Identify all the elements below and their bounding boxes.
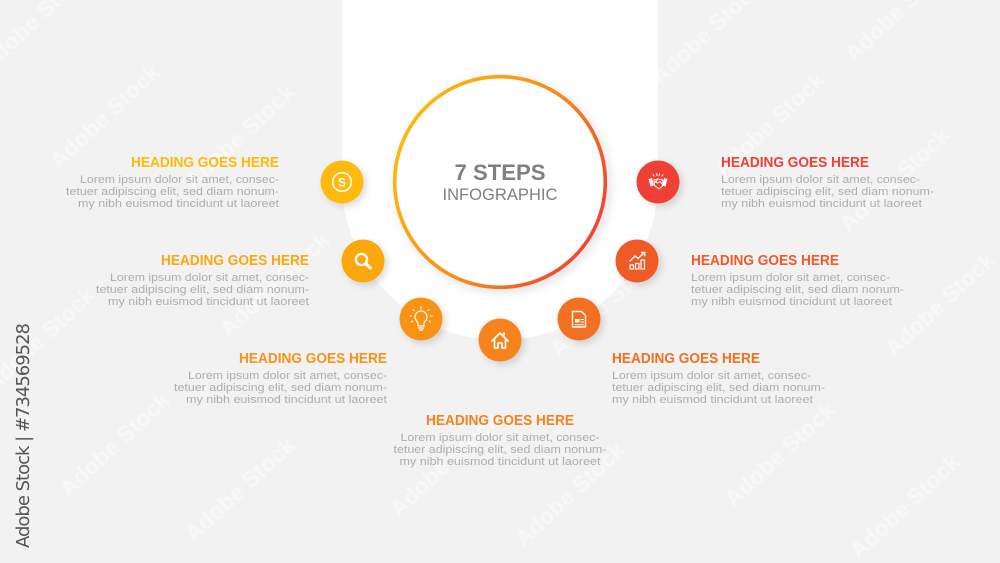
step 7 text: Lorem ipsum dolor sit amet, consec- (721, 174, 921, 186)
step 6 text (691, 253, 905, 308)
step 1 text: HEADING GOES HERE (131, 155, 279, 171)
step 4 text: Lorem ipsum dolor sit amet, consec- (400, 432, 600, 444)
icon: dollar coin: S (338, 176, 346, 190)
icon: light bulb (400, 298, 442, 340)
step 4 text (394, 413, 607, 468)
step 3 text: my nibh euismod tincidunt ut laoreet (186, 394, 387, 406)
icon: handshake (636, 160, 680, 204)
step 3 text: tetuer adipiscing elit, sed diam nonum- (174, 382, 388, 394)
step 1 text: tetuer adipiscing elit, sed diam nonum- (66, 186, 280, 198)
watermark text: Adobe Stock (709, 67, 830, 182)
step 1 text (66, 155, 280, 210)
stock id label: Adobe Stock | #734569528 (13, 323, 34, 548)
watermark text: Adobe Stock (844, 449, 965, 563)
center subtitle: INFOGRAPHIC (442, 186, 558, 204)
step 4 text: my nibh euismod tincidunt ut laoreet (400, 456, 601, 468)
step 3 text: HEADING GOES HERE (239, 351, 387, 367)
watermark text: Adobe Stock (44, 59, 165, 174)
step 1 text: my nibh euismod tincidunt ut laoreet (78, 198, 279, 210)
center circle (395, 77, 605, 287)
step 5 text: my nibh euismod tincidunt ut laoreet (612, 394, 813, 406)
watermark text: Adobe Stock (719, 397, 840, 512)
watermark text: Adobe Stock (384, 407, 505, 522)
step 3 text: Lorem ipsum dolor sit amet, consec- (188, 370, 388, 382)
step 1 text: Lorem ipsum dolor sit amet, consec- (80, 174, 280, 186)
step 6 text: Lorem ipsum dolor sit amet, consec- (691, 272, 891, 284)
white arch panel (342, 0, 658, 340)
step 5 text (612, 351, 826, 406)
step 4 text: tetuer adipiscing elit, sed diam nonum- (394, 444, 607, 456)
step 6 text: tetuer adipiscing elit, sed diam nonum- (691, 284, 905, 296)
step 7 text: tetuer adipiscing elit, sed diam nonum- (721, 186, 935, 198)
watermark text: Adobe Stock (214, 227, 335, 342)
step 7 text: HEADING GOES HERE (721, 155, 869, 171)
watermark text: Adobe Stock (544, 247, 665, 362)
step 6 text: HEADING GOES HERE (691, 253, 839, 269)
step 2 text: tetuer adipiscing elit, sed diam nonum- (96, 284, 310, 296)
step 4 text: HEADING GOES HERE (426, 413, 574, 429)
icon: dollar coin (320, 160, 364, 204)
icon: document (558, 298, 600, 340)
step 3 text (174, 351, 388, 406)
watermark text: Adobe Stock (879, 247, 1000, 362)
step 7 text (721, 155, 935, 210)
step 2 text: HEADING GOES HERE (161, 253, 309, 269)
step 2 text (96, 253, 310, 308)
step 6 text: my nibh euismod tincidunt ut laoreet (691, 296, 892, 308)
step 5 text: HEADING GOES HERE (612, 351, 760, 367)
watermark text: Adobe Stock (54, 387, 175, 502)
step 2 text: my nibh euismod tincidunt ut laoreet (108, 296, 309, 308)
step 5 text: Lorem ipsum dolor sit amet, consec- (612, 370, 812, 382)
center title: 7 STEPS (454, 160, 546, 185)
watermark text: Adobe Stock (509, 437, 630, 552)
step 2 text: Lorem ipsum dolor sit amet, consec- (110, 272, 310, 284)
step 7 text: my nibh euismod tincidunt ut laoreet (721, 198, 922, 210)
icon: growth chart (616, 240, 658, 282)
watermark text: Adobe Stock (179, 432, 300, 547)
icon: house (478, 318, 522, 362)
icon: magnifier (342, 240, 384, 282)
watermark text: Adobe Stock (179, 79, 300, 194)
watermark text: Adobe Stock (834, 122, 955, 237)
step 5 text: tetuer adipiscing elit, sed diam nonum- (612, 382, 826, 394)
